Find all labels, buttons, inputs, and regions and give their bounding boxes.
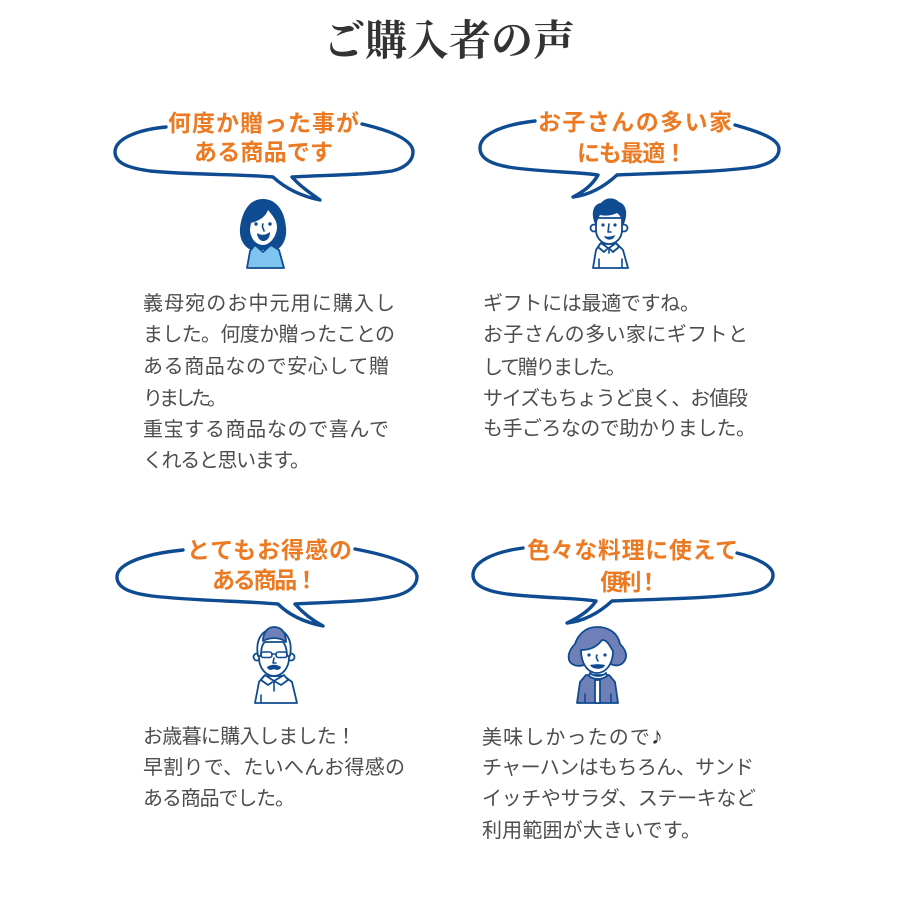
icon: woman with dark hair (240, 199, 286, 268)
icon: older man with glasses (254, 627, 297, 703)
testimonial text: top-left: 義母宛のお中元用に購入し (143, 292, 395, 315)
testimonial text: bottom-right: 利用範囲が大きいです。 (482, 819, 701, 842)
speech bubble heading: top-right: お子さんの多い家 (538, 109, 732, 135)
speech bubble heading: bottom-left (187, 537, 352, 593)
panel: top-right testimonial (480, 109, 779, 440)
speech bubble outline: top-right (480, 121, 779, 197)
speech bubble outline: bottom-left (117, 549, 417, 626)
speech bubble outline: bottom-right (473, 548, 773, 623)
testimonial text: top-right: ギフトには最適ですね。 (483, 292, 700, 315)
title: ご購入者の声 (323, 8, 575, 68)
speech bubble outline: top-left (115, 124, 413, 200)
panel: bottom-left testimonial (117, 537, 417, 810)
testimonial text: top-left: ました。何度か贈ったことの (143, 323, 395, 346)
testimonial text: bottom-right: チャーハンはもちろん、サンド (482, 757, 754, 779)
testimonial text: top-right (483, 292, 756, 440)
testimonial text: top-right: も手ごろなので助かりました。 (483, 417, 756, 440)
speech bubble heading: bottom-right: 色々な料理に使えて (527, 537, 738, 563)
testimonial text: top-left: ある商品なので安心して贈 (143, 355, 389, 378)
testimonial text: top-right: サイズもちょうど良く、お値段 (483, 387, 748, 410)
panel: top-left testimonial (115, 110, 413, 472)
testimonial text: bottom-right: イッチやサラダ、ステーキなど (482, 787, 756, 810)
testimonial text: bottom-left (143, 725, 405, 810)
speech bubble heading: bottom-left: とてもお得感の (187, 537, 352, 563)
testimonial text: top-left: くれると思います。 (143, 450, 310, 472)
speech bubble heading: top-left (168, 110, 359, 165)
testimonial text: bottom-left: ある商品でした。 (143, 787, 295, 810)
speech bubble heading: top-right: にも最適！ (577, 140, 687, 166)
testimonial text: top-right: して贈りました。 (483, 356, 626, 379)
speech bubble heading: top-left: ある商品です (194, 139, 333, 165)
testimonial text: top-left: 重宝する商品なので喜んで (143, 418, 389, 441)
testimonial text: top-right: お子さんの多い家にギフトと (483, 323, 748, 346)
speech bubble heading: bottom-right: 便利！ (600, 569, 660, 595)
testimonial text: bottom-left: 早割りで、たいへんお得感の (143, 756, 405, 779)
testimonial text: bottom-right: 美味しかったので♪ (482, 723, 663, 750)
panel: bottom-right testimonial (473, 537, 773, 842)
testimonial text: bottom-right (482, 723, 756, 842)
speech bubble heading: bottom-right (527, 537, 738, 595)
speech bubble heading: bottom-left: ある商品！ (212, 567, 318, 593)
testimonial text: top-left: りました。 (143, 388, 227, 410)
icon: older woman with bob hair (569, 627, 626, 703)
speech bubble heading: top-right (538, 109, 732, 166)
speech bubble heading: top-left: 何度か贈った事が (168, 110, 359, 136)
icon: young man (590, 198, 628, 268)
testimonial text: top-left (143, 292, 395, 472)
testimonial text: bottom-left: お歳暮に購入しました！ (143, 725, 356, 748)
